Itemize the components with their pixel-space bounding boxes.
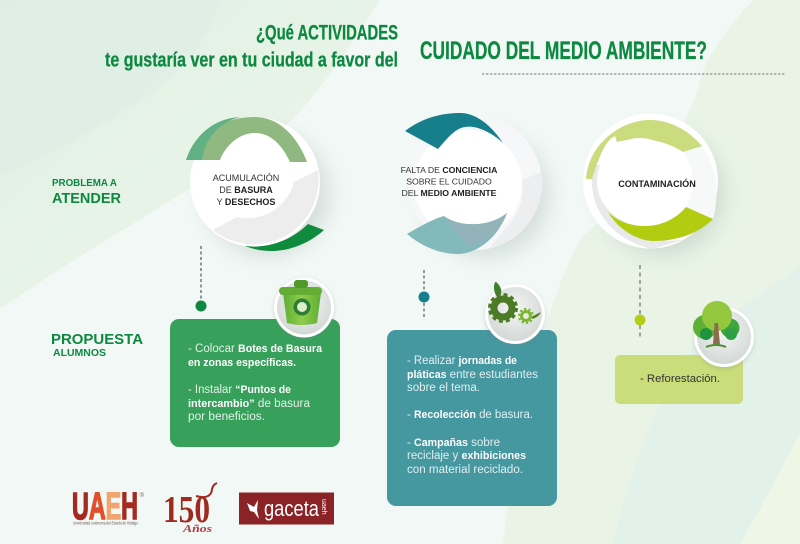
logo: UAEH: UAEH bbox=[72, 486, 138, 528]
circle text: conciencia: DEL MEDIO AMBIENTE bbox=[402, 188, 497, 198]
logo: 150 años: Años bbox=[182, 524, 212, 535]
panel text: conciencia: - Campañas sobre bbox=[407, 437, 500, 449]
circle text: basura bbox=[213, 173, 279, 207]
connector: basura bbox=[196, 246, 206, 312]
circle diagram: conciencia bbox=[401, 113, 549, 257]
panel text: conciencia bbox=[407, 355, 538, 476]
label: propuesta alumnos bbox=[51, 331, 143, 359]
circle diagram: contaminacion bbox=[583, 114, 724, 255]
logo: UAEH: Universidad Autónoma del Estado de Hidalgo bbox=[73, 520, 138, 526]
connector: conciencia bbox=[418, 270, 430, 318]
circle text: conciencia: SOBRE EL CUIDADO bbox=[406, 176, 492, 186]
panel text: conciencia: - Realizar jornadas de bbox=[407, 355, 517, 367]
circle text: basura: DE BASURA bbox=[219, 185, 273, 195]
panel text: conciencia: sobre el tema. bbox=[407, 382, 480, 394]
icon: tree bbox=[693, 301, 754, 369]
circle text: basura: Y DESECHOS bbox=[217, 197, 275, 207]
logo: gaceta: gaceta bbox=[264, 496, 320, 521]
panel text: conciencia: pláticas entre estudiantes bbox=[407, 369, 538, 381]
icon: gears bbox=[485, 282, 545, 346]
panel text: basura: - Instalar “Puntos de bbox=[188, 384, 291, 396]
circle text: conciencia bbox=[401, 165, 498, 198]
panel: propuesta conciencia bbox=[387, 330, 557, 506]
label: problema a atender: ATENDER bbox=[52, 191, 122, 207]
panel: propuesta contaminacion bbox=[615, 355, 743, 404]
label: problema a atender bbox=[52, 178, 122, 207]
title bbox=[105, 22, 707, 72]
circle text: conciencia: FALTA DE CONCIENCIA bbox=[401, 165, 498, 175]
connector: contaminacion bbox=[634, 265, 646, 340]
panel text: basura bbox=[188, 343, 322, 423]
panel text: contaminacion: - Reforestación. bbox=[640, 373, 720, 385]
logo: gaceta bbox=[239, 492, 334, 524]
logo: UAEH: ® bbox=[140, 492, 145, 499]
title: te gustaría ver en tu ciudad a favor del bbox=[105, 48, 398, 72]
circle text: basura: ACUMULACIÓN bbox=[213, 173, 279, 183]
panel text: basura: intercambio” de basura bbox=[188, 398, 311, 410]
label: problema a atender: PROBLEMA A bbox=[52, 178, 117, 189]
panel text: basura: en zonas específicas. bbox=[188, 357, 296, 369]
label: propuesta alumnos: PROPUESTA bbox=[51, 331, 143, 348]
logo: gaceta: uaeh bbox=[320, 499, 327, 515]
title: ¿Qué ACTIVIDADES bbox=[256, 22, 398, 44]
panel text: basura: por beneficios. bbox=[188, 411, 265, 423]
panel text: conciencia: reciclaje y exhibiciones bbox=[407, 450, 526, 462]
panel text: basura: - Colocar Botes de Basura bbox=[188, 343, 322, 355]
circle diagram: basura bbox=[186, 117, 329, 256]
panel text: conciencia: con material reciclado. bbox=[407, 464, 523, 476]
logo: 150 años: 150 bbox=[163, 489, 210, 531]
icon: recycling bin bbox=[274, 278, 334, 339]
panel text: conciencia: - Recolección de basura. bbox=[407, 409, 533, 421]
circle text: contaminacion: CONTAMINACIÓN bbox=[618, 178, 696, 189]
panel: propuesta basura bbox=[170, 319, 340, 447]
label: propuesta alumnos: ALUMNOS bbox=[53, 348, 106, 359]
